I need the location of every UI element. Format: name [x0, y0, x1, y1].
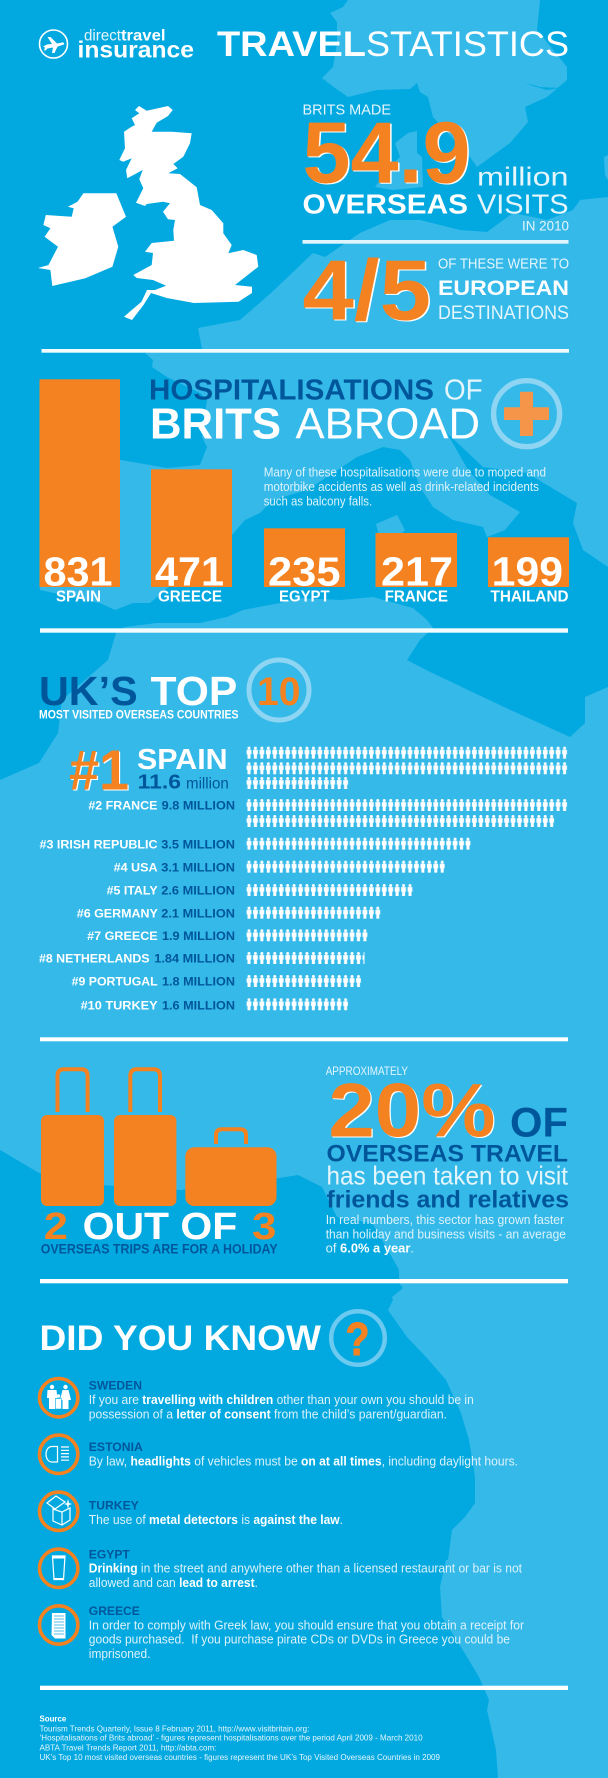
text: sector growth note: of 6.0% a year.: [326, 1242, 414, 1256]
ranking: number 10 Turkey: 1.6 MILLION: [162, 998, 235, 1012]
heading: did you know: DID YOU KNOW: [40, 1319, 321, 1358]
heading: UK's top 10: MOST VISITED OVERSEAS COUNTRIES: [39, 708, 239, 721]
ranking: number 5 Italy: 2.6 MILLION: [161, 884, 235, 898]
fact: Egypt: [40, 1547, 523, 1590]
panel: hospitalisations heading: OF: [444, 374, 483, 406]
logo wordmark: direct: [84, 28, 122, 45]
ranking: number 7 Greece: 1.9 MILLION: [162, 929, 235, 943]
ranking: number 3 Irish Republic: 3.5 MILLION: [161, 837, 235, 851]
source notes: UK’s Top 10 most visited overseas countries - figures represent the UK’s Top Visited Overseas Countries in 2009: [40, 1752, 440, 1762]
panel: hospitalisations heading: [149, 374, 483, 448]
ranking: number 2 France: [88, 798, 568, 827]
icon: family: [40, 1378, 78, 1417]
icon: plane in circle: [40, 30, 68, 58]
text: of these were to european destinations: DESTINATIONS: [438, 302, 569, 324]
text: Egypt fact: allowed and can lead to arrest.: [89, 1576, 258, 1590]
ranking: number 3 Irish Republic: [40, 837, 471, 851]
text: Egypt fact: Drinking in the street and anywhere other than a licensed restaurant or bar is not: [89, 1562, 523, 1576]
icon: circled 10: 10: [257, 670, 300, 714]
text: of overseas travel: [326, 1099, 568, 1168]
text: brits made: BRITS MADE: [302, 103, 391, 119]
big number 54.9: 54.9: [304, 106, 472, 203]
bar: France 217: [376, 533, 457, 606]
source notes: Source: [40, 1714, 66, 1724]
bar: Thailand 199: THAILAND: [490, 589, 568, 606]
source notes: [40, 1714, 440, 1762]
fact: Sweden: [40, 1378, 474, 1421]
text: hospitalisation note: Many of these hospitalisations were due to moped and: [264, 466, 546, 480]
bar: France 217: FRANCE: [385, 589, 448, 606]
map of UK and Ireland: [38, 106, 258, 320]
text: Turkey fact: The use of metal detectors is against the law.: [89, 1513, 343, 1527]
bar: Egypt 235: 235: [268, 549, 340, 595]
ranking: number 5 Italy: [107, 884, 413, 898]
ranking: number 9 Portugal: 1.8 MILLION: [162, 974, 235, 988]
heading: UK's top 10: [39, 668, 239, 721]
ranking: number 1 Spain: [69, 738, 229, 803]
icon: circled question mark: [331, 1311, 385, 1365]
text: Egypt fact: EGYPT: [89, 1547, 130, 1561]
header logo: direct travel insurance: [40, 28, 194, 62]
text: Greece fact: In order to comply with Greek law, you should ensure that you obtain a receipt for: [89, 1618, 524, 1632]
pictogram: Spain people: [246, 747, 568, 789]
ranking: number 2 France: #2 FRANCE: [88, 798, 157, 812]
text: sector growth note: [326, 1213, 566, 1256]
bar: Thailand 199: 199: [492, 549, 563, 595]
ranking: number 1 Spain: #1: [70, 739, 130, 803]
text: overseas visits: [302, 188, 568, 219]
text: has been taken to visit: has been taken to visit: [326, 1161, 569, 1191]
text: approximately: APPROXIMATELY: [326, 1065, 408, 1078]
bar chart: hospitalisations: [40, 379, 569, 606]
text: 2 out of 3: 2: [44, 1206, 68, 1248]
title: travel statistics: TRAVEL: [217, 25, 366, 64]
bar: Egypt 235: EGYPT: [279, 589, 330, 606]
text: million: million: [477, 162, 568, 192]
fact: Greece: [40, 1604, 524, 1661]
text: Sweden fact: [89, 1379, 474, 1421]
text: Greece fact: GREECE: [89, 1604, 140, 1618]
source notes: ‘Hospitalisations of Brits abroad’ - figures represent hospitalisations over the period April 2009 - March 2010: [40, 1733, 423, 1743]
text: friends and relatives: friends and relatives: [326, 1187, 569, 1214]
icon: suitcase 1: [41, 1069, 104, 1206]
bar: Spain 831: 831: [44, 549, 112, 595]
bar: Greece 471: GREECE: [158, 589, 222, 606]
ranking: number 7 Greece: [87, 929, 368, 943]
big number 54.9: 54.9: [302, 105, 470, 202]
text: Estonia fact: [89, 1440, 518, 1469]
ranking: number 6 Germany: 2.1 MILLION: [161, 906, 235, 920]
icon: headlight: [40, 1435, 78, 1474]
text: sector growth note: In real numbers, this sector has grown faster: [326, 1213, 564, 1227]
title: travel statistics: STATISTICS: [366, 25, 569, 64]
text: Sweden fact: possession of a letter of consent from the child’s parent/guardian.: [89, 1407, 447, 1421]
text: sector growth note: than holiday and business visits - an average: [326, 1227, 566, 1241]
big fraction 4/5: 4/5: [304, 244, 432, 339]
ranking: number 4 USA: #4 USA: [114, 860, 158, 874]
text: 2 out of 3: OUT OF: [83, 1206, 237, 1248]
Ireland: [38, 193, 126, 286]
ranking: number 9 Portugal: [72, 974, 361, 988]
big fraction 4/5: 4/5: [302, 243, 431, 338]
logo wordmark: insurance: [78, 36, 194, 62]
ranking: number 1 Spain: million: [186, 776, 229, 793]
ranking: number 2 France: 9.8 MILLION: [162, 798, 235, 812]
text: in 2010: IN 2010: [522, 218, 569, 234]
ranking: number 8 Netherlands: [39, 952, 364, 966]
ranking: number 8 Netherlands: 1.84 MILLION: [154, 952, 235, 966]
text: Sweden fact: SWEDEN: [89, 1379, 142, 1393]
text: overseas visits: OVERSEAS: [302, 188, 468, 219]
big number 20 percent: 20%: [330, 1070, 497, 1155]
fact: Turkey: [40, 1492, 343, 1531]
ranking: number 5 Italy: #5 ITALY: [107, 884, 158, 898]
text: of these were to european destinations: EUROPEAN: [438, 277, 569, 300]
ranking: number 6 Germany: [77, 906, 381, 920]
Great Britain: [119, 106, 258, 320]
ranking: number 1 Spain: #1: [69, 738, 129, 802]
heading: UK's top 10: TOP: [150, 668, 237, 714]
text: Greece fact: [89, 1604, 524, 1661]
text: Greece fact: imprisoned.: [89, 1647, 150, 1661]
ranking: number 3 Irish Republic: #3 IRISH REPUBLIC: [40, 837, 158, 851]
panel: hospitalisations heading: ABROAD: [296, 399, 480, 448]
text: 2 out of 3: [41, 1206, 278, 1256]
text: Estonia fact: ESTONIA: [89, 1440, 143, 1454]
text: Turkey fact: TURKEY: [89, 1498, 139, 1512]
fact: Estonia: [40, 1435, 518, 1474]
panel: 20 percent of overseas travel: [326, 1065, 569, 1256]
icon: circled question mark: ?: [346, 1313, 370, 1365]
heading: UK's top 10: UK’S: [39, 668, 138, 714]
text: of overseas travel: OVERSEAS TRAVEL: [326, 1141, 568, 1168]
source notes: ABTA Travel Trends Report 2011, http://abta.com:: [40, 1742, 216, 1752]
text: 2 out of 3: 3: [252, 1206, 276, 1248]
source notes: Tourism Trends Quarterly, Issue 8 February 2011, http://www.visitbritain.org:: [40, 1723, 309, 1733]
ranking: number 9 Portugal: #9 PORTUGAL: [72, 974, 158, 988]
bar: Greece 471: 471: [155, 549, 224, 595]
icon: suitcase 2: [114, 1069, 176, 1206]
bar: Spain 831: [40, 379, 120, 606]
text: hospitalisation note: motorbike accidents as well as drink-related incidents: [264, 480, 539, 494]
text: Sweden fact: If you are travelling with children other than your own you should be in: [89, 1393, 474, 1407]
text: hospitalisation note: such as balcony falls.: [264, 494, 372, 508]
text: hospitalisation note: [264, 466, 546, 508]
panel: hospitalisations heading: BRITS: [150, 399, 281, 448]
text: Turkey fact: [89, 1498, 343, 1527]
icon: receipt: [40, 1606, 78, 1644]
bar: Spain 831: SPAIN: [56, 589, 101, 606]
text: Greece fact: goods purchased. If you purchase pirate CDs or DVDs in Greece you could be: [89, 1633, 510, 1647]
title: travel statistics: [217, 25, 569, 64]
text: Estonia fact: By law, headlights of vehicles must be on at all times, including daylight hours.: [89, 1455, 518, 1469]
bar: Greece 471: [151, 469, 232, 606]
text: of these were to european destinations: OF THESE WERE TO: [438, 257, 569, 273]
text: of these were to european destinations: [438, 257, 569, 324]
icon: circled 10: [249, 660, 309, 720]
ranking: number 6 Germany: #6 GERMANY: [77, 906, 158, 920]
bar: Thailand 199: [488, 537, 569, 606]
bar: France 217: 217: [381, 549, 453, 595]
text: overseas visits: VISITS: [477, 188, 568, 219]
logo wordmark: travel: [121, 28, 166, 45]
bar: Egypt 235: [264, 528, 345, 606]
ranking: number 8 Netherlands: #8 NETHERLANDS: [39, 952, 150, 966]
text: 2 out of 3: OVERSEAS TRIPS ARE FOR A HOLIDAY: [41, 1240, 278, 1256]
icon: pint glass: [40, 1549, 78, 1588]
panel: overseas visits: [302, 103, 569, 339]
icon: treasure box: [40, 1492, 78, 1531]
ranking: number 7 Greece: #7 GREECE: [87, 929, 158, 943]
text: Egypt fact: [89, 1547, 523, 1590]
text: of overseas travel: OF: [510, 1099, 568, 1146]
icon: briefcase: [185, 1129, 276, 1206]
icons: suitcases: [41, 1069, 276, 1206]
big number 20 percent: 20%: [328, 1069, 495, 1154]
ranking: number 1 Spain: 11.6: [138, 772, 181, 794]
ranking: number 4 USA: [114, 860, 445, 874]
ranking: number 10 Turkey: [81, 998, 348, 1012]
icon: medical cross in circle: [494, 381, 560, 447]
ranking: number 1 Spain: SPAIN: [137, 744, 228, 776]
ranking: number 4 USA: 3.1 MILLION: [161, 860, 235, 874]
panel: hospitalisations heading: HOSPITALISATIONS: [149, 374, 434, 406]
ranking: number 10 Turkey: #10 TURKEY: [81, 998, 158, 1012]
